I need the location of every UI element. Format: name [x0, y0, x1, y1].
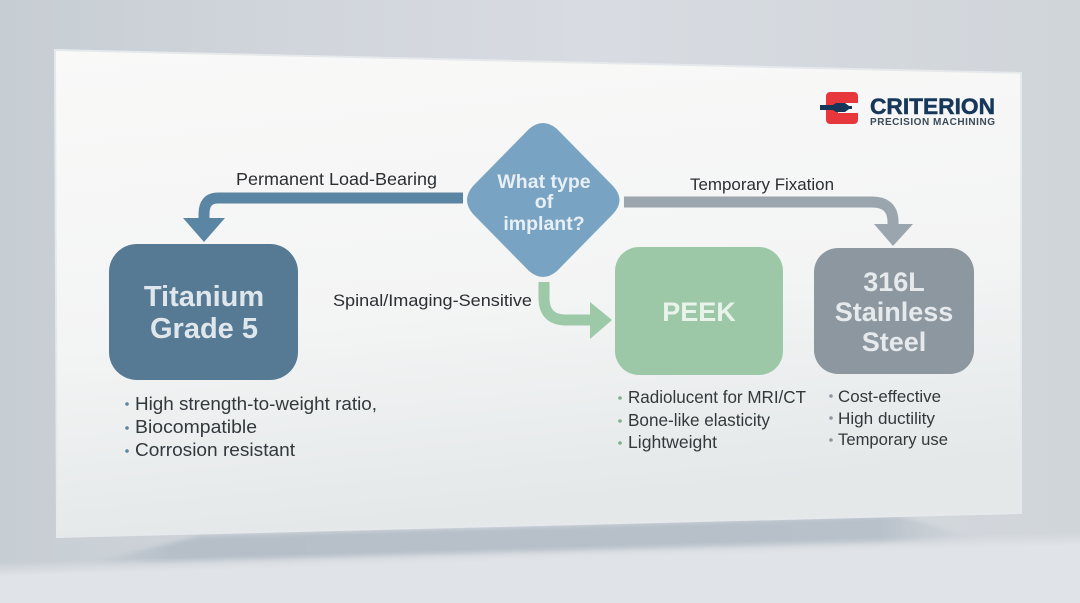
list: titanium: Biocompatible	[135, 416, 257, 437]
list: stainless	[829, 388, 948, 449]
logo tagline: PRECISION MACHINING	[870, 117, 995, 128]
list: titanium: Corrosion resistant	[135, 439, 295, 460]
label: spinal imaging-sensitive: Spinal/Imaging-Sensitive	[333, 291, 532, 310]
card: stainless: Steel	[862, 327, 926, 357]
label: permanent load-bearing: Permanent Load-Bearing	[236, 169, 437, 189]
card: titanium: Titanium	[144, 281, 264, 313]
card: stainless: Stainless	[835, 297, 953, 327]
whiteboard panel	[55, 50, 1021, 537]
list: PEEK: Radiolucent for MRI/CT	[628, 387, 806, 407]
list: PEEK: Lightweight	[628, 432, 717, 452]
card: titanium: Grade 5	[150, 313, 258, 345]
icon: red C with tool	[820, 92, 858, 124]
list: stainless: Temporary use	[838, 431, 948, 449]
logo wordmark: CRITERION	[870, 94, 995, 119]
card: stainless: 316L	[863, 267, 925, 297]
diamond text: What type	[497, 171, 591, 193]
decision diamond	[467, 123, 620, 277]
logo	[820, 92, 995, 128]
list: stainless: High ductility	[838, 410, 936, 428]
card: stainless	[814, 248, 974, 374]
panel shadow	[80, 516, 990, 565]
list: titanium: High strength-to-weight ratio,	[135, 393, 377, 414]
arrow: to PEEK	[544, 282, 612, 339]
arrow: to stainless	[624, 202, 913, 246]
card: PEEK	[615, 247, 783, 375]
diamond text: of	[535, 191, 554, 213]
floor	[0, 530, 1080, 603]
list: PEEK	[618, 387, 806, 452]
label: temporary fixation: Temporary Fixation	[690, 176, 834, 194]
list: titanium	[125, 393, 377, 460]
arrow: to titanium	[183, 198, 463, 242]
card: titanium	[109, 244, 298, 380]
card: PEEK: PEEK	[662, 297, 736, 327]
list: stainless: Cost-effective	[838, 388, 941, 406]
list: PEEK: Bone-like elasticity	[628, 410, 770, 430]
diamond text: implant?	[503, 213, 585, 235]
